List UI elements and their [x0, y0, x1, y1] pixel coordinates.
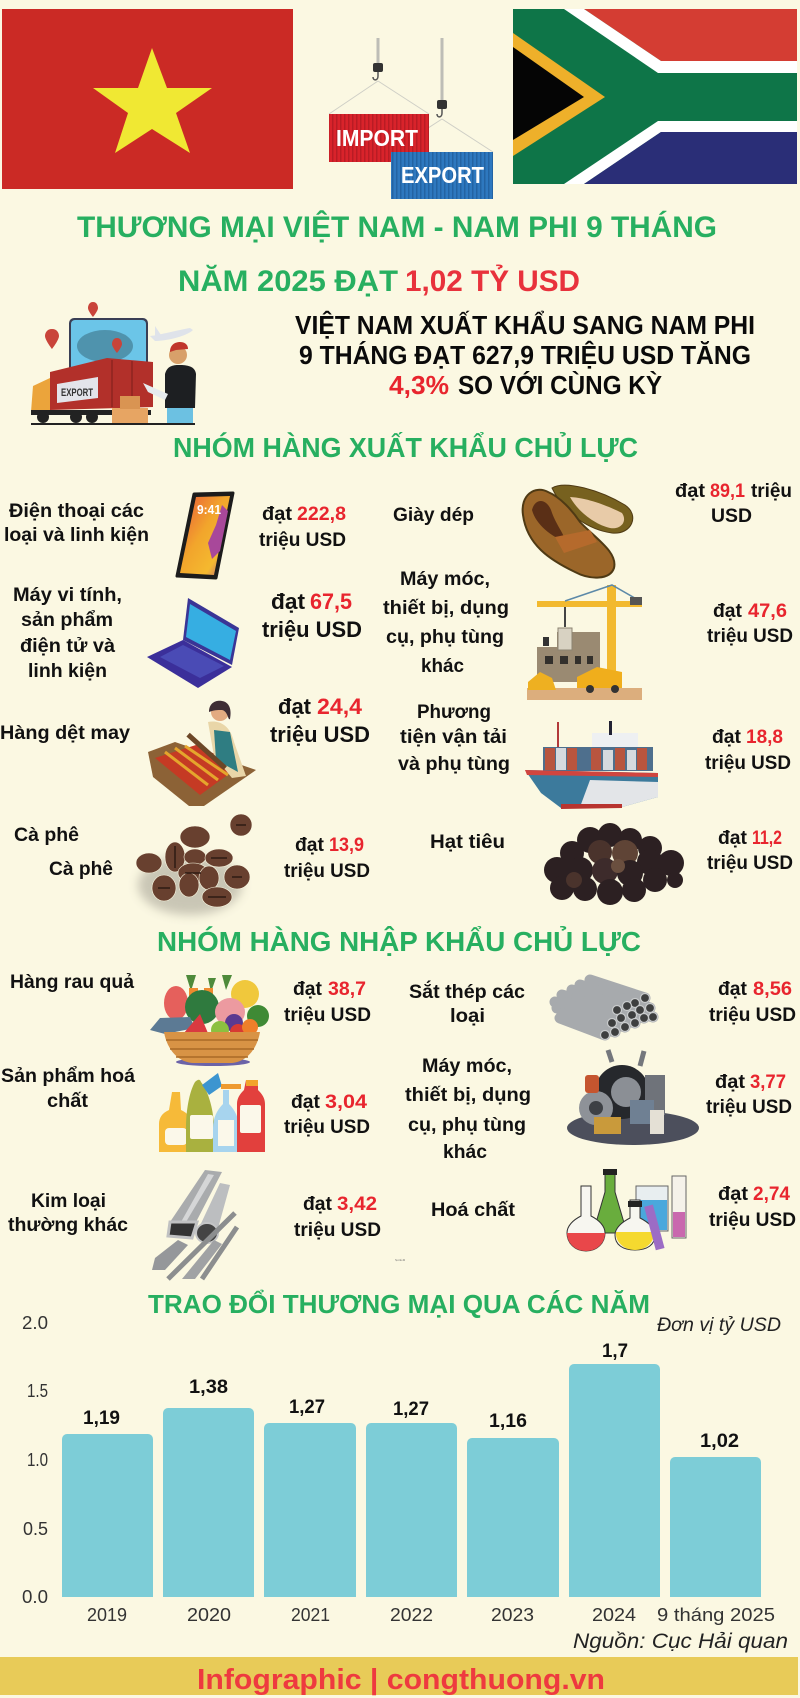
item: phones: 222,8: [297, 504, 346, 525]
item: machinery: cụ, phụ tùng: [386, 627, 504, 648]
item: phones: đạt: [262, 504, 293, 525]
x axis labels: 2019: [87, 1605, 127, 1625]
item: phones: loại và linh kiện: [4, 525, 149, 546]
icon: export truck and worker: [31, 302, 196, 425]
item: fruit and vegetables: Hàng rau quả: [10, 972, 134, 993]
y axis labels: 0.0: [22, 1587, 48, 1607]
item: vehicles: triệu USD: [705, 753, 791, 774]
item: vehicles: và phụ tùng: [398, 754, 510, 775]
flag: Vietnam: [2, 9, 293, 189]
icon: import export containers: EXPORT: [401, 162, 484, 188]
title: 1,02 TỶ USD: [405, 264, 580, 298]
title: NĂM 2025 ĐẠT: [178, 264, 398, 298]
item: footwear: triệu: [751, 481, 792, 502]
item: footwear: USD: [711, 506, 752, 527]
x axis labels: 2020: [187, 1605, 231, 1625]
y axis labels: 1.5: [27, 1381, 48, 1401]
y axis labels: [22, 1313, 48, 1607]
icon: export truck and worker: EXPORT: [61, 387, 93, 399]
item: machinery: đạt: [713, 601, 743, 622]
item: computers: linh kiện: [28, 661, 107, 682]
bar chart: trade by year: [22, 1313, 775, 1625]
x axis labels: 2022: [390, 1605, 433, 1625]
y axis labels: 0.5: [23, 1519, 48, 1539]
item: iron and steel: 8,56: [753, 979, 792, 1000]
text block: export summary: VIỆT NAM XUẤT KHẨU SANG NAM PHI: [295, 310, 755, 340]
item: footwear: [393, 481, 792, 578]
footer band: [0, 1657, 798, 1696]
item: fruit and vegetables: triệu USD: [284, 1005, 371, 1026]
value labels: 1,27: [289, 1397, 325, 1418]
item: coffee: đạt: [295, 835, 325, 856]
item: pepper: 11,2: [752, 828, 782, 849]
item: base metals: Kim loại: [31, 1191, 106, 1212]
item: phones: triệu USD: [259, 530, 346, 551]
item: base metals: triệu USD: [294, 1220, 381, 1241]
item: iron and steel: triệu USD: [709, 1005, 796, 1026]
item: computers: Máy vi tính,: [13, 585, 122, 606]
item: fruit and vegetables: đạt: [293, 979, 323, 1000]
item: chemicals: 2,74: [753, 1184, 790, 1205]
title: [77, 210, 717, 298]
flag: South Africa: [513, 9, 797, 184]
item: machinery imports: đạt: [715, 1072, 746, 1093]
item: textiles: Hàng dệt may: [0, 723, 130, 744]
item: pepper: đạt: [718, 828, 748, 849]
item: iron and steel: [409, 979, 796, 1040]
item: footwear: đạt: [675, 481, 706, 502]
icon: import export containers: IMPORT: [336, 125, 418, 151]
item: iron and steel: loại: [450, 1006, 485, 1027]
item: chemical products: [1, 1066, 370, 1152]
item: vehicles: [398, 702, 791, 809]
item: machinery imports: cụ, phụ tùng: [408, 1115, 526, 1136]
item: iron and steel: đạt: [718, 979, 748, 1000]
footer band: Infographic | congthuong.vn: [197, 1664, 605, 1696]
item: base metals: thường khác: [8, 1215, 128, 1236]
item: pepper: Hạt tiêu: [430, 832, 505, 853]
item: iron and steel: Sắt thép các: [409, 981, 525, 1003]
item: chemical products: Sản phẩm hoá: [1, 1066, 135, 1087]
item: machinery imports: Máy móc,: [422, 1056, 512, 1077]
item: vehicles: Phương: [417, 702, 491, 723]
item: machinery: [383, 569, 793, 700]
item: computers: [13, 585, 362, 688]
item: machinery: khác: [421, 656, 464, 677]
item: machinery imports: khác: [443, 1142, 487, 1163]
item: computers: điện tử và: [20, 636, 115, 657]
item: coffee: Cà phê: [14, 825, 79, 846]
text block: export summary: SO VỚI CÙNG KỲ: [458, 370, 662, 400]
heading: trade over the years: TRAO ĐỔI THƯƠNG MẠI QUA CÁC NĂM: [148, 1289, 650, 1319]
item: computers: 67,5: [310, 589, 352, 614]
item: phones: 9:41: [197, 502, 221, 517]
text block: export summary: [295, 310, 755, 400]
x axis labels: 2021: [291, 1605, 330, 1625]
x axis labels: [87, 1605, 775, 1625]
item: coffee: Cà phê: [49, 859, 113, 880]
value labels: 1,16: [489, 1411, 527, 1432]
item: machinery: thiết bị, dụng: [383, 598, 509, 619]
x axis labels: 2023: [491, 1605, 534, 1625]
text block: export summary: 4,3%: [389, 370, 449, 400]
bars: [62, 1364, 761, 1597]
item: vehicles: 18,8: [746, 727, 783, 748]
item: chemicals: [431, 1169, 796, 1251]
item: chemical products: chất: [47, 1091, 89, 1112]
item: chemicals: Hoá chất: [431, 1200, 516, 1221]
item: base metals: đạt: [303, 1194, 333, 1215]
item: textiles: 24,4: [317, 694, 363, 719]
value labels: [83, 1341, 739, 1452]
heading: main exports: NHÓM HÀNG XUẤT KHẨU CHỦ LỰC: [173, 431, 638, 463]
item: coffee: 13,9: [329, 835, 364, 856]
item: pepper: triệu USD: [707, 853, 793, 874]
item: textiles: [0, 694, 370, 806]
item: computers: đạt: [271, 589, 306, 614]
item: base metals: 3,42: [337, 1194, 377, 1215]
item: machinery imports: [405, 1050, 792, 1163]
value labels: 1,27: [393, 1399, 429, 1420]
item: machinery imports: 3,77: [750, 1072, 786, 1093]
item: machinery imports: thiết bị, dụng: [405, 1085, 531, 1106]
item: chemical products: 3,04: [325, 1092, 367, 1113]
item: textiles: đạt: [278, 694, 312, 719]
tiny watermark: Tạo biểu đồ: [395, 1258, 405, 1262]
item: coffee: triệu USD: [284, 861, 370, 882]
value labels: 1,19: [83, 1408, 120, 1429]
item: base metals: [8, 1170, 381, 1279]
item: textiles: triệu USD: [270, 722, 370, 747]
item: vehicles: tiện vận tải: [400, 727, 507, 748]
value labels: 1,7: [602, 1341, 628, 1362]
item: coffee: [14, 814, 370, 915]
y axis labels: 1.0: [27, 1450, 48, 1470]
item: chemicals: triệu USD: [709, 1210, 796, 1231]
text block: export summary: 9 THÁNG ĐẠT 627,9 TRIỆU USD TĂNG: [299, 340, 751, 370]
item: phones: [4, 493, 346, 578]
x axis labels: 9 tháng 2025: [657, 1605, 775, 1625]
item: chemicals: đạt: [718, 1184, 749, 1205]
value labels: 1,02: [700, 1431, 739, 1452]
item: pepper: [430, 823, 793, 905]
item: machinery imports: triệu USD: [706, 1097, 792, 1118]
item: phones: Điện thoại các: [9, 501, 144, 522]
item: machinery: Máy móc,: [400, 569, 490, 590]
item: footwear: Giày dép: [393, 505, 474, 526]
value labels: 1,38: [189, 1377, 228, 1398]
icon: import export containers: [329, 38, 493, 199]
item: computers: sản phẩm: [21, 610, 113, 631]
item: footwear: 89,1: [710, 481, 745, 502]
source: Nguồn: Cục Hải quan: [573, 1630, 788, 1653]
item: machinery: triệu USD: [707, 626, 793, 647]
unit note: Đơn vị tỷ USD: [657, 1315, 781, 1336]
heading: main imports: NHÓM HÀNG NHẬP KHẨU CHỦ LỰC: [157, 925, 641, 957]
item: computers: triệu USD: [262, 617, 362, 642]
item: chemical products: triệu USD: [284, 1117, 370, 1138]
y axis labels: 2.0: [22, 1313, 48, 1333]
item: chemical products: đạt: [291, 1092, 321, 1113]
item: fruit and vegetables: [10, 972, 371, 1066]
item: vehicles: đạt: [712, 727, 742, 748]
item: machinery: 47,6: [748, 601, 787, 622]
x axis labels: 2024: [592, 1605, 636, 1625]
title: THƯƠNG MẠI VIỆT NAM - NAM PHI 9 THÁNG: [77, 210, 717, 244]
item: fruit and vegetables: 38,7: [328, 979, 366, 1000]
